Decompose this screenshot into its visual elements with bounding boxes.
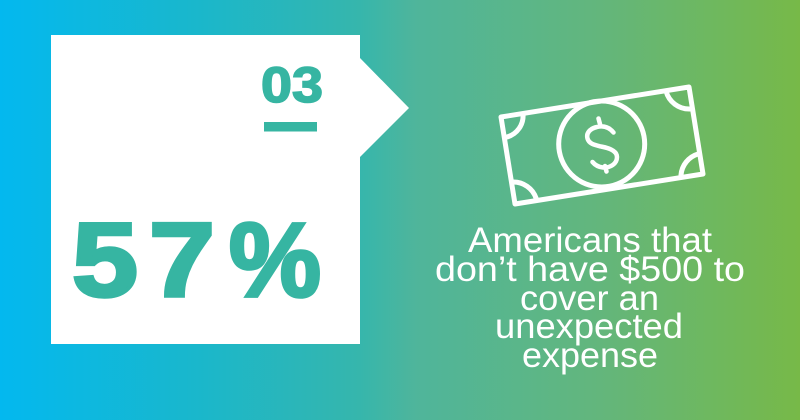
caption text: unexpected — [495, 307, 683, 346]
main statistic: 7 — [149, 202, 215, 319]
card shape — [51, 35, 409, 344]
bill outline — [501, 87, 703, 204]
section number: 03 — [261, 57, 323, 113]
bill corner arcs — [507, 91, 698, 198]
main statistic: 5 — [72, 202, 138, 319]
caption text: cover an — [520, 279, 659, 318]
caption text: Americans that — [468, 221, 712, 260]
icon: dollar bill — [501, 87, 703, 204]
dollar symbol — [587, 118, 617, 172]
caption text — [435, 221, 745, 375]
caption text: expense — [522, 336, 658, 375]
main statistic: % — [229, 202, 321, 319]
number underline — [264, 122, 317, 132]
bill centre circle — [559, 101, 645, 187]
panel: white arrow card — [51, 35, 409, 344]
caption text: don’t have $500 to — [435, 250, 745, 289]
